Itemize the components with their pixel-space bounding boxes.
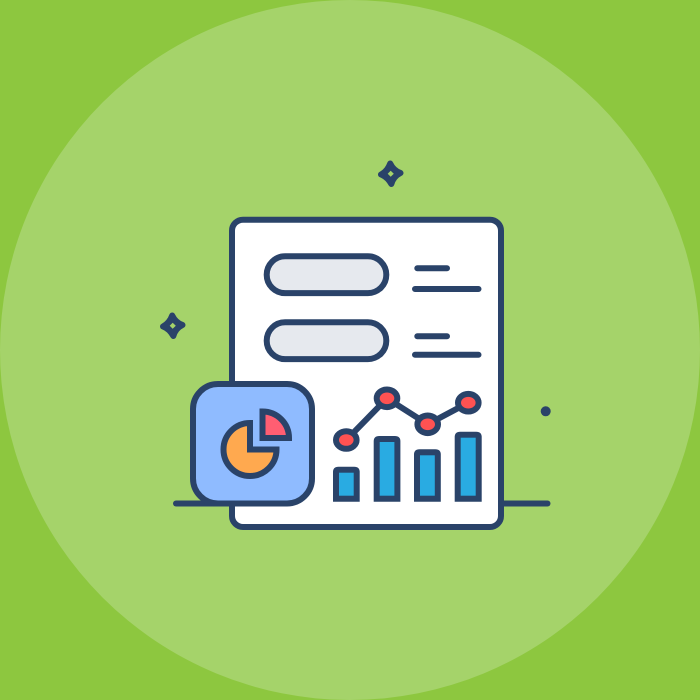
point 3	[417, 416, 438, 433]
icon: top sparkle	[381, 164, 400, 184]
bar 4	[455, 432, 482, 502]
panel: pie chart tile	[193, 384, 312, 504]
second text lines	[415, 336, 478, 355]
point 1	[336, 431, 357, 449]
line chart points	[336, 390, 479, 449]
first pill	[267, 256, 386, 293]
bar chart	[333, 432, 482, 502]
blue tile	[193, 384, 312, 504]
ground line	[176, 500, 548, 506]
line chart connector	[346, 398, 468, 440]
icon: left sparkle	[163, 316, 182, 336]
icon: dot	[541, 406, 551, 416]
left sparkle hole	[170, 323, 176, 329]
orange pie slice	[224, 423, 276, 476]
bar 2	[374, 436, 400, 502]
top sparkle hole	[388, 171, 394, 177]
first text lines	[415, 268, 478, 289]
red pie slice	[262, 412, 289, 438]
point 2	[377, 390, 397, 407]
panel: document	[232, 220, 501, 527]
document sheet	[232, 220, 501, 527]
bar 3	[414, 449, 441, 502]
point 4	[458, 394, 479, 412]
bar 1	[333, 467, 360, 502]
second pill	[267, 322, 386, 359]
